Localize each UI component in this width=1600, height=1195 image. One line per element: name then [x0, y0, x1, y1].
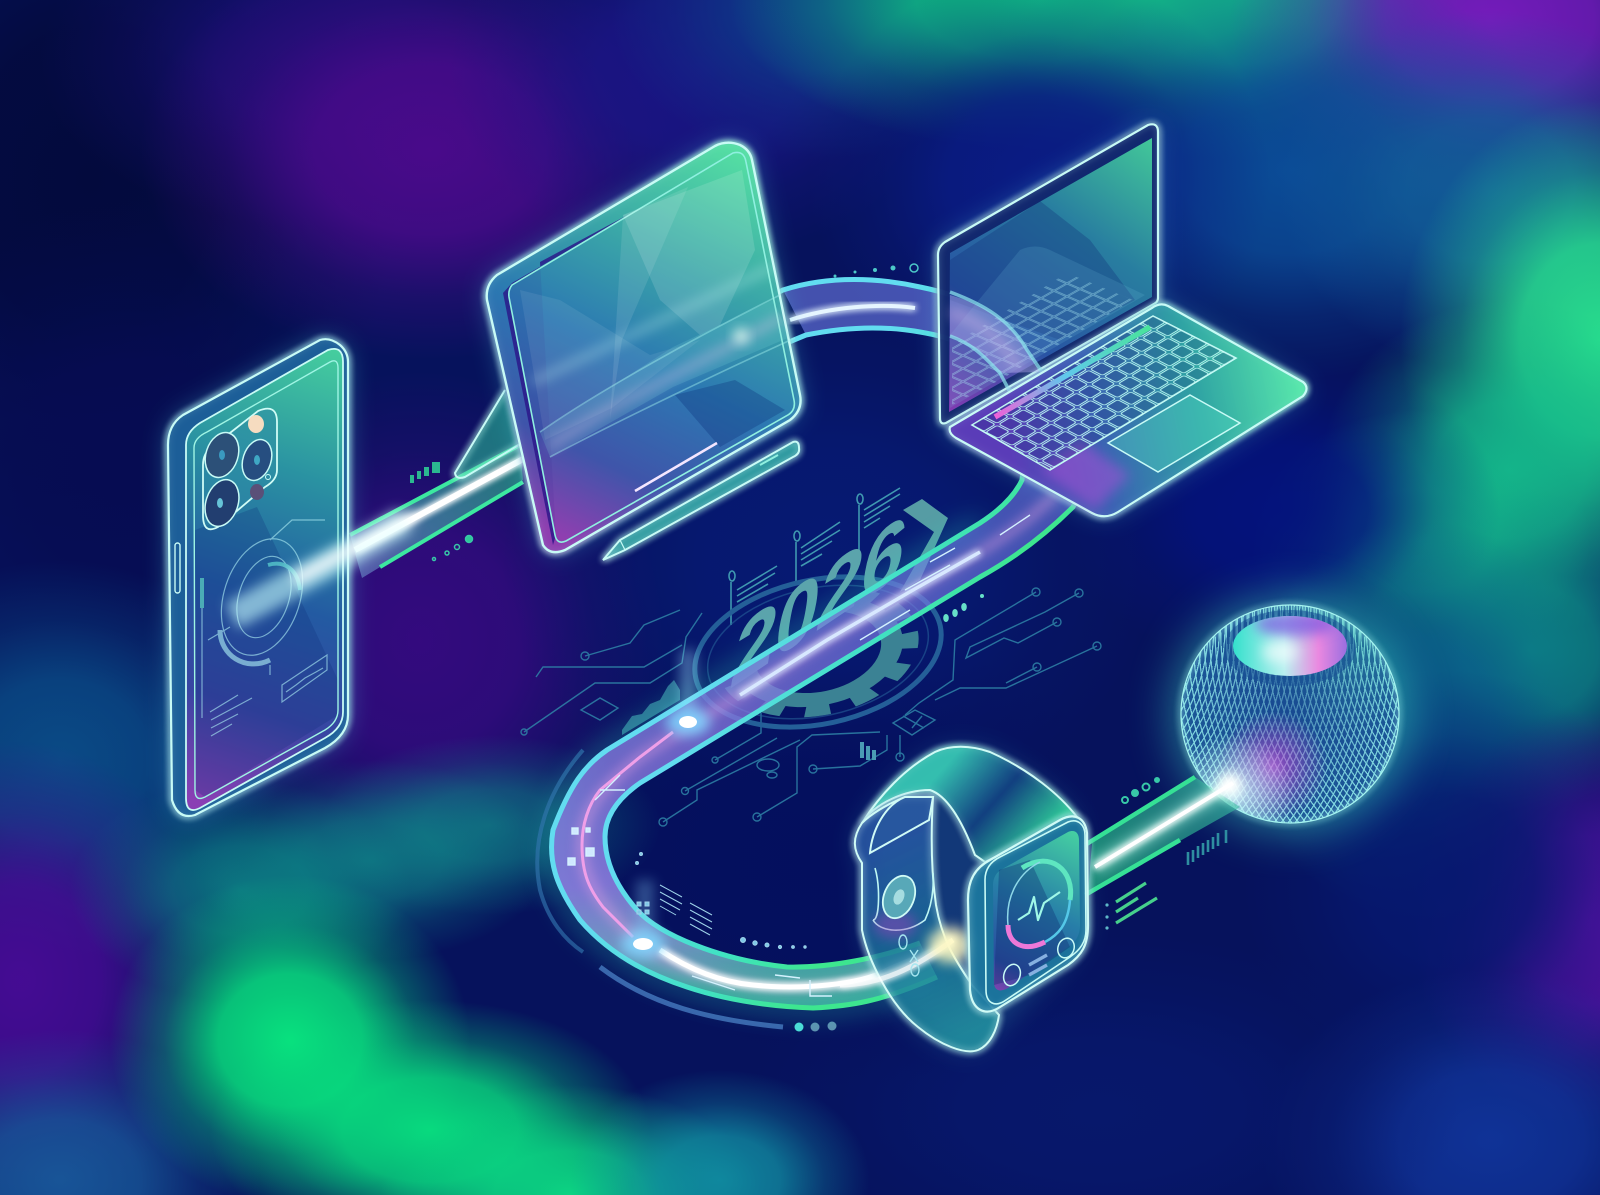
laptop trackpad — [1108, 395, 1240, 472]
chevron after year — [900, 499, 948, 592]
link beam: watch to speaker — [1085, 773, 1242, 930]
watch strap lug — [870, 797, 933, 853]
laptop base purple tint — [1040, 440, 1130, 510]
laptop keyboard — [970, 315, 1238, 471]
main data tube — [540, 280, 1083, 1008]
watch bezel — [985, 821, 1086, 1004]
link 2 flare — [1095, 783, 1233, 867]
link bars — [410, 462, 440, 483]
link 2 end flare — [1218, 773, 1242, 797]
tablet halo — [487, 143, 801, 552]
laptop screen — [949, 138, 1152, 412]
tablet stand — [455, 390, 522, 478]
watch band beam — [840, 940, 953, 985]
watch strap purple tint — [873, 911, 917, 939]
dots above the tube arch — [834, 264, 918, 278]
HUD: 3 annotation pins — [729, 488, 900, 625]
tablet glass streak — [533, 267, 773, 382]
watch band inner line — [873, 868, 933, 930]
link 2 bars — [1188, 830, 1226, 865]
tablet home bar — [635, 443, 717, 491]
micro data near U-turn — [636, 852, 806, 949]
tube data marks — [568, 515, 1030, 996]
tube seen through tablet — [540, 300, 790, 457]
tube outer edge — [540, 280, 1083, 967]
laptop base — [950, 304, 1306, 516]
phone side button — [175, 543, 180, 593]
gear emblem — [692, 574, 944, 730]
phone halo — [168, 339, 348, 816]
watch halo — [855, 747, 1088, 1051]
phone inner line — [194, 361, 338, 798]
device: tablet with stand and pencil — [455, 143, 801, 560]
year label 2026: 2026 — [725, 491, 914, 710]
watch band holes — [899, 935, 919, 976]
speaker mesh — [1181, 605, 1399, 823]
tube light core glow — [582, 490, 1060, 987]
speaker outline — [1181, 605, 1399, 823]
tablet screen — [509, 152, 794, 542]
device: smart speaker — [1172, 596, 1408, 832]
main data tube: outer glow — [551, 523, 980, 1008]
phone beam bright core — [295, 515, 415, 580]
laptop touch bar — [995, 327, 1150, 417]
HUD: small chart by the tube — [622, 594, 984, 760]
phone HUD rings — [200, 520, 327, 736]
tablet screen facets — [520, 170, 785, 447]
watch band left and lower — [855, 797, 999, 1051]
laptop halo — [938, 124, 1307, 515]
laptop keyboard reflection — [940, 246, 1145, 410]
tablet pencil — [603, 442, 799, 560]
phone camera module — [199, 409, 277, 531]
bottom arc decoration — [537, 750, 836, 1032]
tube inner edge — [550, 328, 1024, 1008]
link edge lines — [350, 445, 523, 567]
device: laptop — [938, 124, 1307, 516]
link 2 dots — [1122, 778, 1159, 803]
tube white lower beam — [660, 940, 953, 987]
link 2 band — [1088, 777, 1240, 893]
tube edges through tablet — [540, 295, 795, 457]
watch lens flare — [928, 927, 972, 963]
data node 2 — [621, 880, 665, 958]
watch screen shade — [994, 860, 1070, 985]
tablet dark left bezel — [503, 203, 650, 545]
data node 1 — [666, 650, 710, 736]
isometric device ecosystem illustration — [152, 116, 1432, 1060]
tube body — [551, 280, 1083, 1008]
link 2 edges — [1085, 777, 1195, 895]
background HUD: circuit traces — [521, 588, 1101, 826]
tablet light spot — [734, 329, 748, 343]
phone glass shade — [195, 507, 338, 797]
tablet beam — [550, 317, 783, 445]
tube arch beam — [790, 306, 915, 320]
tube blue-white core — [740, 552, 980, 695]
laptop lid — [938, 124, 1158, 423]
link dots — [432, 536, 472, 560]
watch screen icons — [1001, 936, 1077, 988]
tube pink trace — [582, 732, 673, 937]
laptop screen shade — [950, 201, 1135, 340]
watch crown disc — [877, 871, 921, 923]
watch case — [968, 816, 1088, 1012]
speaker halo — [1172, 596, 1408, 832]
phone beam flare — [232, 520, 405, 616]
link band — [350, 447, 523, 578]
link 2 text bullets — [1105, 903, 1109, 930]
watch heart-rate ring — [1008, 861, 1071, 947]
tube seen through laptop — [950, 292, 1042, 392]
device: smartwatch — [840, 747, 1088, 1051]
watch band top — [862, 747, 1077, 862]
speaker touch disk — [1233, 612, 1347, 676]
link 2 text lines — [1116, 883, 1157, 923]
watch screen — [993, 831, 1080, 990]
link core — [355, 458, 525, 550]
phone back glass — [186, 349, 343, 810]
phone body — [168, 339, 348, 816]
link 2 core — [1095, 783, 1233, 867]
tablet body — [487, 143, 801, 552]
speaker top rim — [1224, 610, 1356, 686]
device: smartphone — [168, 339, 415, 816]
link beam: phone to tablet — [350, 445, 525, 578]
